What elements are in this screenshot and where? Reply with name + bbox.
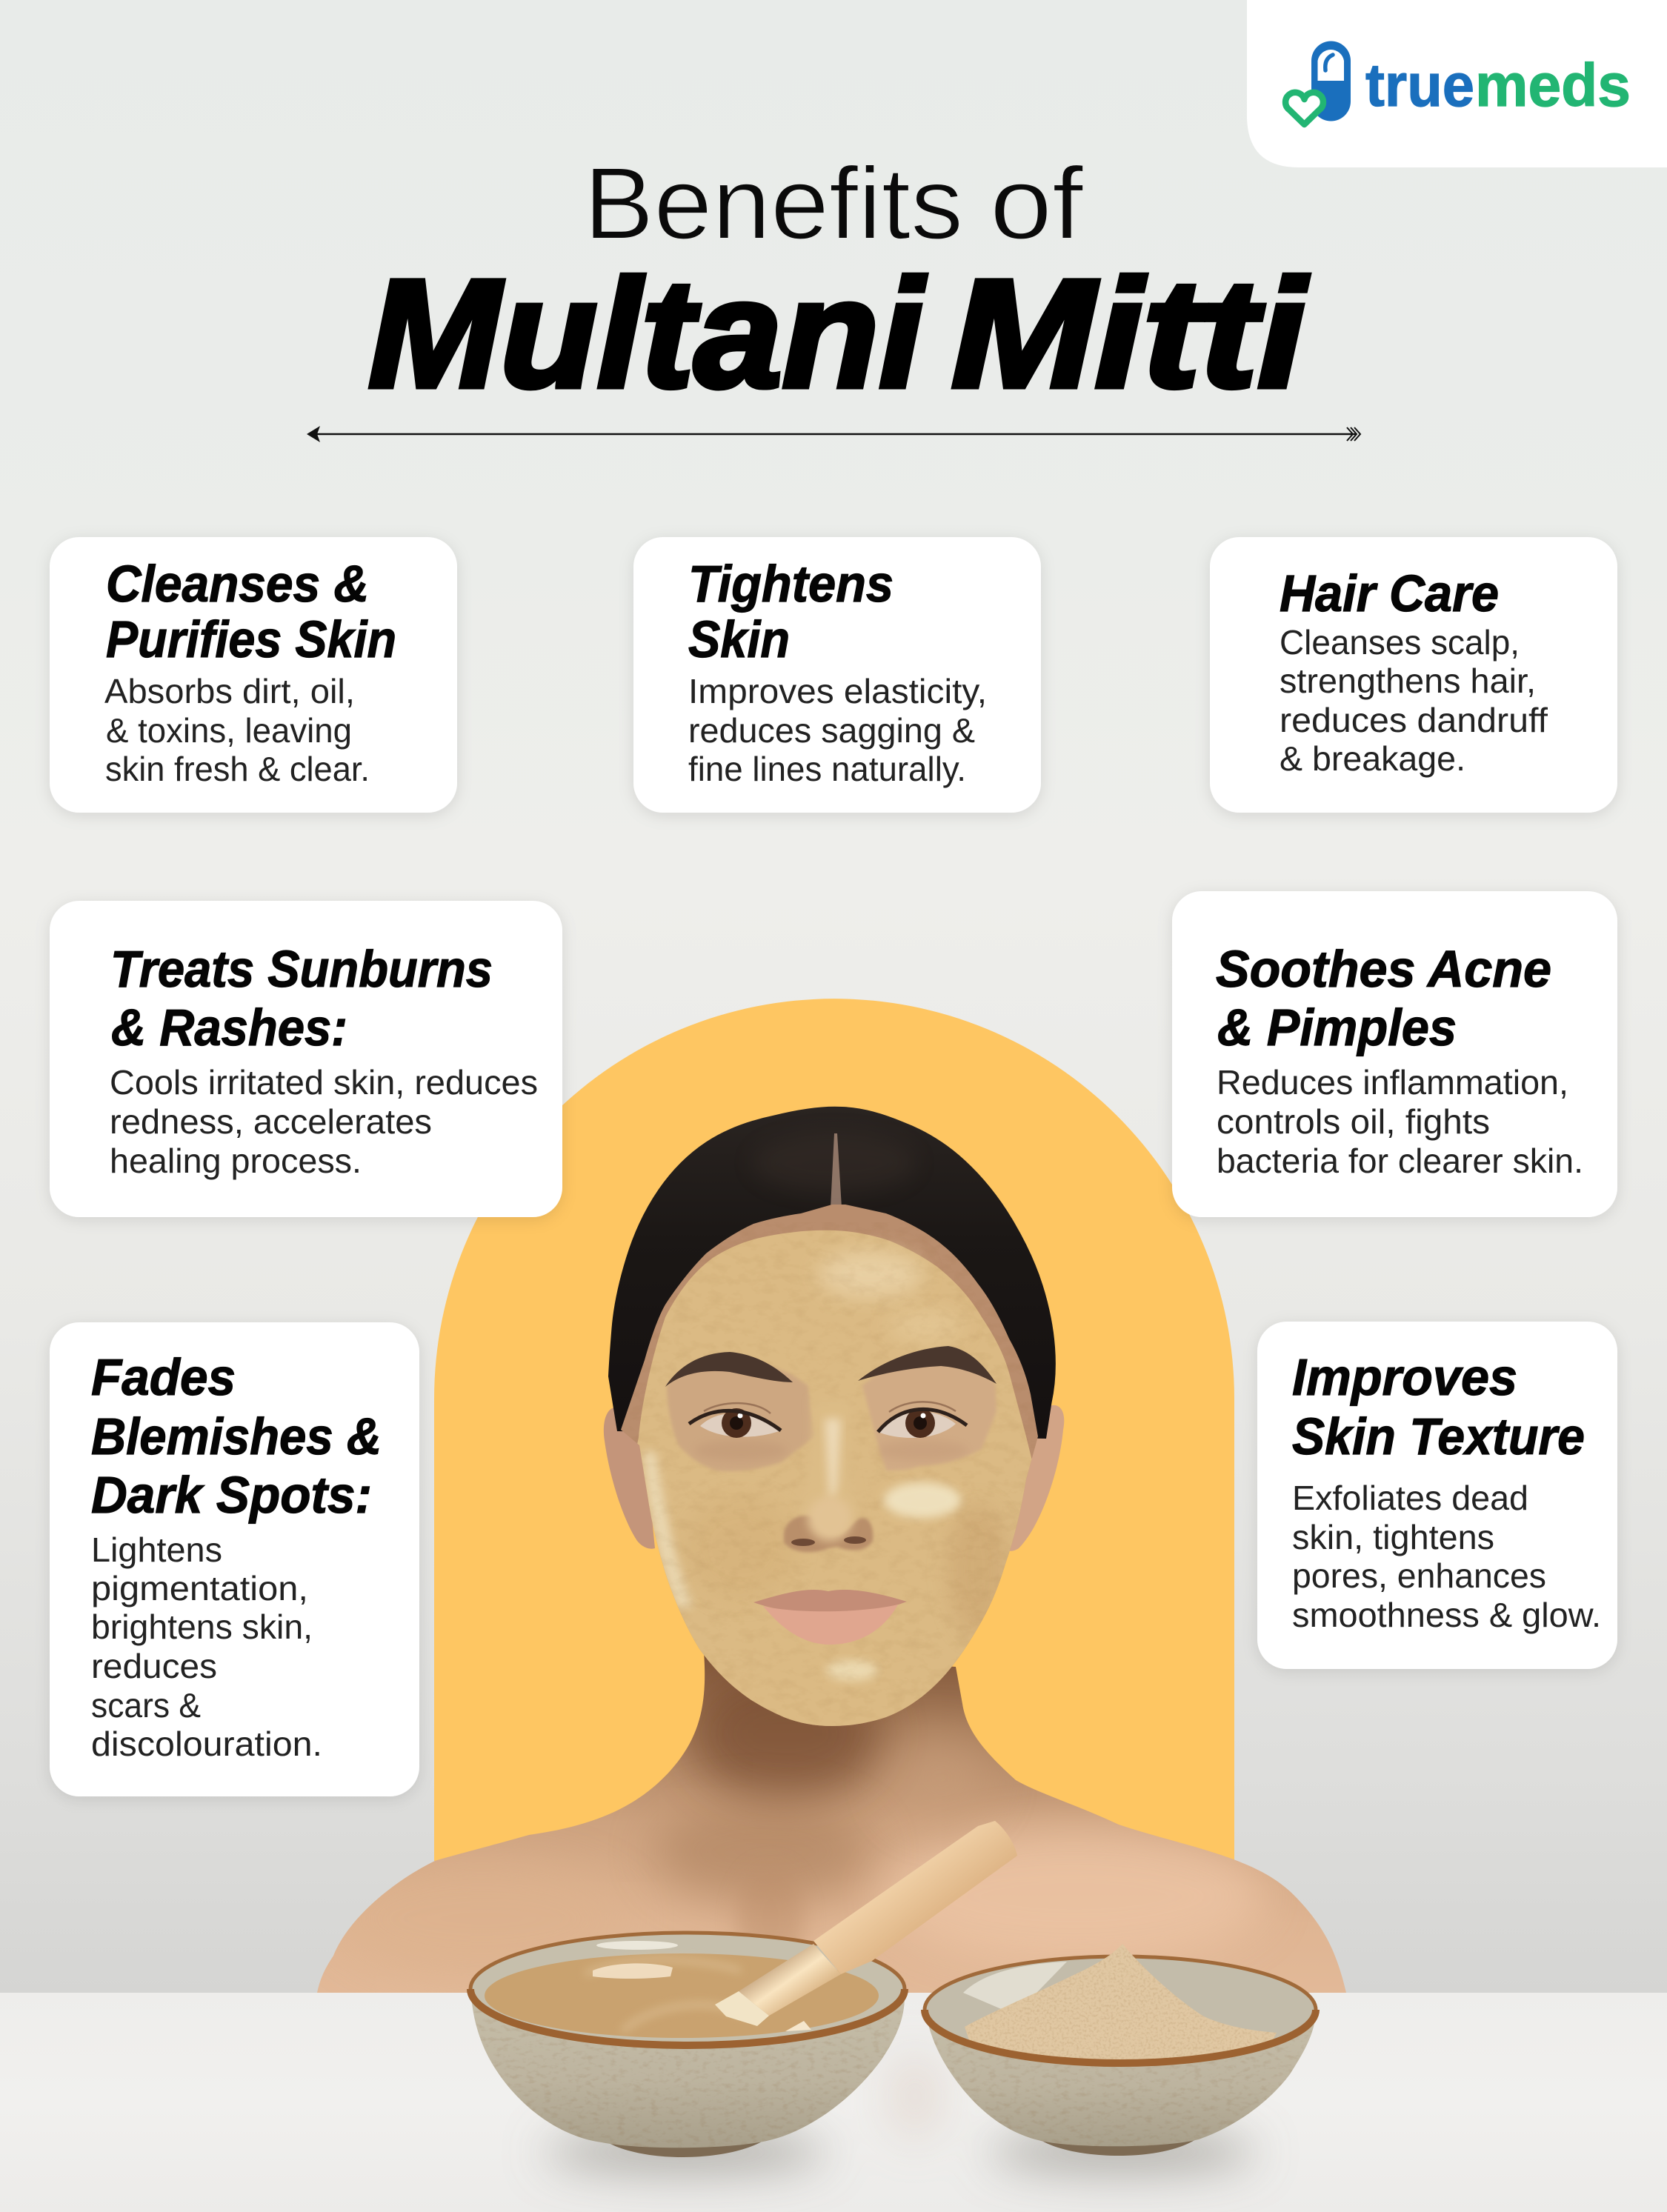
left under-eye shade xyxy=(695,1440,787,1461)
bowl foot xyxy=(593,2126,778,2157)
front rim xyxy=(925,2010,1316,2063)
panel: soothes acne and pimples xyxy=(1172,891,1617,1217)
bowl body xyxy=(925,2011,1316,2146)
body text: skin, tightens xyxy=(1292,1518,1494,1556)
lips xyxy=(753,1590,907,1645)
left eye skin patch xyxy=(667,1361,815,1471)
left bowl with paste and brush xyxy=(467,1821,1017,2157)
body text: reduces sagging & xyxy=(688,711,975,750)
heading: Cleanses & xyxy=(106,555,369,613)
body text: discolouration. xyxy=(91,1725,322,1763)
body text: pores, enhances xyxy=(1292,1556,1546,1595)
panel: treats sunburns and rashes xyxy=(50,901,562,1217)
heading: Soothes Acne xyxy=(1216,940,1551,998)
yellow arch xyxy=(434,999,1234,1861)
hair xyxy=(608,1107,1056,1439)
right ear xyxy=(1008,1405,1064,1551)
body text: Cleanses scalp, xyxy=(1280,623,1520,662)
icon: heart xyxy=(1285,93,1323,124)
panel: tightens skin xyxy=(633,537,1041,813)
bowl body xyxy=(471,1996,905,2148)
title line one: Benefits xyxy=(584,147,963,261)
panel: cleanses and purifies skin xyxy=(50,537,457,813)
body text: bacteria for clearer skin. xyxy=(1217,1142,1583,1180)
panel: hair care xyxy=(1210,537,1617,813)
body text: Improves elasticity, xyxy=(688,672,987,710)
bowl interior xyxy=(925,1956,1316,2063)
body text: controls oil, fights xyxy=(1217,1102,1490,1141)
front rim xyxy=(470,1989,905,2045)
cheek highlight xyxy=(884,1482,961,1518)
body text: strengthens hair, xyxy=(1280,662,1536,700)
body text: pigmentation, xyxy=(91,1569,308,1608)
arrow divider xyxy=(307,426,1360,442)
panel: improves skin texture xyxy=(1257,1322,1617,1669)
heading: Blemishes & xyxy=(91,1408,382,1465)
brush ferrule xyxy=(739,1944,841,2016)
face xyxy=(621,1205,1045,1741)
left eye xyxy=(689,1403,781,1438)
title line two: Multani xyxy=(368,248,926,420)
right eye xyxy=(878,1402,967,1438)
left eyebrow xyxy=(665,1352,793,1387)
body text: healing process. xyxy=(110,1142,362,1180)
body text: Reduces inflammation, xyxy=(1217,1063,1568,1102)
clay mask xyxy=(630,1230,1037,1741)
body text: reduces xyxy=(91,1647,217,1685)
hair parting xyxy=(831,1133,842,1207)
right bowl with powder xyxy=(919,1941,1319,2156)
left ear xyxy=(604,1407,655,1549)
brush handle xyxy=(813,1821,1017,1974)
table surface xyxy=(0,1993,1667,2212)
title xyxy=(368,147,1309,420)
body text: Exfoliates dead xyxy=(1292,1479,1528,1517)
heading: Tightens xyxy=(688,555,894,613)
body text: brightens skin, xyxy=(91,1608,313,1646)
bowl shadows on table xyxy=(545,2052,1256,2173)
right under-eye shade xyxy=(876,1440,968,1461)
body text: & toxins, leaving xyxy=(106,711,352,750)
icon: pill xyxy=(1311,41,1351,121)
heading: Treats Sunburns xyxy=(110,940,493,998)
brush xyxy=(715,1821,1017,2026)
heading: Skin Texture xyxy=(1292,1408,1585,1465)
body text: smoothness & glow. xyxy=(1292,1596,1601,1634)
paste xyxy=(485,1953,879,2038)
title line two: Mitti xyxy=(951,248,1309,420)
body text: skin fresh & clear. xyxy=(105,750,370,788)
title line one: of xyxy=(990,147,1084,261)
logo panel xyxy=(1247,0,1667,167)
heading: Purifies Skin xyxy=(106,610,396,668)
hair sheen near parting xyxy=(753,1133,916,1193)
right eye skin patch xyxy=(862,1357,996,1470)
powder xyxy=(965,1944,1277,2059)
body text: scars & xyxy=(91,1686,201,1725)
heading: Improves xyxy=(1292,1348,1517,1406)
bowl foot xyxy=(1030,2130,1206,2156)
nose xyxy=(784,1400,873,1552)
body text: Absorbs dirt, oil, xyxy=(104,672,355,710)
shoulders and neck xyxy=(317,1652,1346,1993)
heading: & Pimples xyxy=(1217,999,1457,1056)
brush bristles xyxy=(715,1991,769,2026)
heading: Dark Spots: xyxy=(91,1466,372,1524)
heading: Hair Care xyxy=(1280,564,1499,622)
logo wordmark: meds xyxy=(1475,52,1631,119)
body text: & breakage. xyxy=(1280,739,1465,778)
panel: fades blemishes and dark spots xyxy=(50,1322,419,1796)
logo wordmark: true xyxy=(1365,52,1474,119)
heading: Skin xyxy=(688,610,790,668)
body text: fine lines naturally. xyxy=(688,750,966,788)
right eyebrow xyxy=(858,1346,996,1384)
heading: Fades xyxy=(91,1348,236,1406)
illustration: woman with clay mask xyxy=(317,1107,1346,1993)
heading: & Rashes: xyxy=(111,999,347,1056)
body text: reduces dandruff xyxy=(1280,701,1548,739)
body text: redness, accelerates xyxy=(110,1102,432,1141)
body text: Cools irritated skin, reduces xyxy=(110,1063,538,1102)
body text: Lightens xyxy=(91,1530,222,1569)
bowl interior xyxy=(470,1933,905,2045)
